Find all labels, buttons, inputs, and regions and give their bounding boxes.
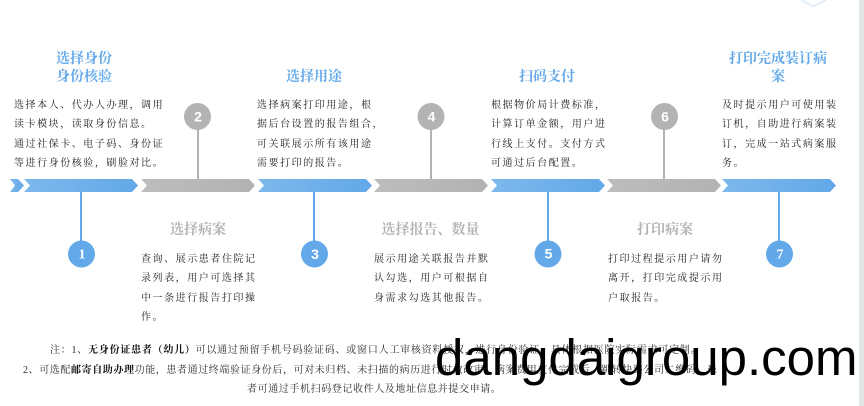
text: step 6: 离开，打印完成提示用 xyxy=(608,273,724,284)
text: step 3: 选择病案打印用途，根 xyxy=(257,100,372,111)
text: step 1: 选择本人、代办人办理，调用 xyxy=(14,100,164,111)
text: step 6: 户取报告。 xyxy=(608,293,666,304)
marker 2: 2 xyxy=(194,108,202,124)
text: step 5 xyxy=(491,99,606,169)
marker 1: 1 xyxy=(78,248,86,262)
marker 4 xyxy=(418,103,444,179)
step bar 2 xyxy=(141,179,255,192)
text: step 2: 中一条进行报告打印操 xyxy=(141,293,256,304)
text: step 3: 需要打印的报告。 xyxy=(257,158,349,169)
text: step 4 xyxy=(374,253,490,304)
heading: step 7 xyxy=(729,50,827,85)
text: step 6 xyxy=(608,253,724,304)
marker 3: 3 xyxy=(311,246,319,262)
heading: step 5: 扫码支付 xyxy=(519,70,575,85)
marker 6 xyxy=(651,103,678,179)
text: step 3 xyxy=(257,99,384,169)
step bar 7 xyxy=(722,179,836,192)
text: step 7: 及时提示用户可使用装 xyxy=(722,100,838,111)
step bar 3 xyxy=(258,179,372,192)
text: step 5: 根据物价局计费标准， xyxy=(491,100,606,111)
note line 1: 注：1、无身份证患者（幼儿）可以通过预留手机号码验证码、或窗口人工审核资料授权，进行身份验证，具体根据医院实际需求可定制。 xyxy=(50,345,701,356)
step bar 6 xyxy=(607,179,721,192)
text: step 2: 作。 xyxy=(141,312,164,323)
marker 4: 4 xyxy=(428,108,436,124)
text: step 7: 订，完成一站式病案服 xyxy=(722,139,838,150)
heading: step 1: 身份核验 xyxy=(56,70,112,85)
text: step 5: 可通过后台配置。 xyxy=(491,158,583,169)
heading: step 7: 打印完成装订病 xyxy=(729,52,827,67)
text: step 4: 展示用途关联报告并默 xyxy=(374,254,490,265)
text: step 1 xyxy=(14,99,164,169)
marker 1 xyxy=(68,192,95,268)
heading: step 4: 选择报告、数量 xyxy=(382,223,480,238)
heading: step 2: 选择病案 xyxy=(170,223,226,238)
text: step 6: 打印过程提示用户请勿 xyxy=(608,254,724,265)
step bar 4 xyxy=(374,179,488,192)
marker 2 xyxy=(184,103,211,179)
text: step 1: 等进行身份核验，刷脸对比。 xyxy=(14,158,164,169)
text: step 7: 订机，自助进行病案装 xyxy=(722,119,838,130)
heading: step 7: 案 xyxy=(771,70,785,85)
text: step 5: 计算订单金额，用户进 xyxy=(491,119,606,130)
text: step 4: 认勾选，用户可根据自 xyxy=(374,273,490,284)
text: step 3: 可关联展示所有该用途 xyxy=(257,139,372,150)
text: step 1: 通过社保卡、电子码、身份证 xyxy=(14,139,164,150)
text: step 7: 务。 xyxy=(722,158,745,169)
step bar 1 xyxy=(24,179,138,192)
text: step 2: 录列表，用户可选择其 xyxy=(141,273,256,284)
text: step 1: 读卡模块，读取身份信息。 xyxy=(14,119,153,130)
text: step 3: 据后台设置的报告组合， xyxy=(257,119,384,130)
note line 3: 者可通过手机扫码登记收件人及地址信息并提交申请。 xyxy=(247,384,501,395)
text: step 2: 查询、展示患者住院记 xyxy=(141,254,256,265)
marker 3 xyxy=(301,192,328,268)
text: step 4: 身需求勾选其他报告。 xyxy=(374,293,490,304)
heading: step 3: 选择用途 xyxy=(286,70,342,85)
text: step 5: 行线上支付。支付方式 xyxy=(491,139,606,150)
text: step 7 xyxy=(722,99,838,169)
heading: step 6: 打印病案 xyxy=(637,223,693,238)
note line 2: 2、可选配邮寄自助办理功能，患者通过终端验证身份后，可对未归档、未扫描的病历进行时效改审，病案费用支付完成后，跳转快递公司二维码，患 xyxy=(23,365,718,376)
start chevron xyxy=(10,179,24,192)
heading: step 1 xyxy=(56,50,112,85)
scrollbar strip xyxy=(859,0,864,406)
marker 7 xyxy=(766,192,793,268)
text: step 2 xyxy=(141,253,256,323)
marker 5: 5 xyxy=(545,246,553,262)
heading: step 1: 选择身份 xyxy=(56,52,112,67)
marker 6: 6 xyxy=(661,108,669,124)
marker 5 xyxy=(534,192,562,268)
step bar 5 xyxy=(491,179,605,192)
marker 7: 7 xyxy=(776,248,784,262)
watermark: dangdaigroup.com xyxy=(435,329,857,386)
icon: hexagon fragment xyxy=(801,0,826,7)
